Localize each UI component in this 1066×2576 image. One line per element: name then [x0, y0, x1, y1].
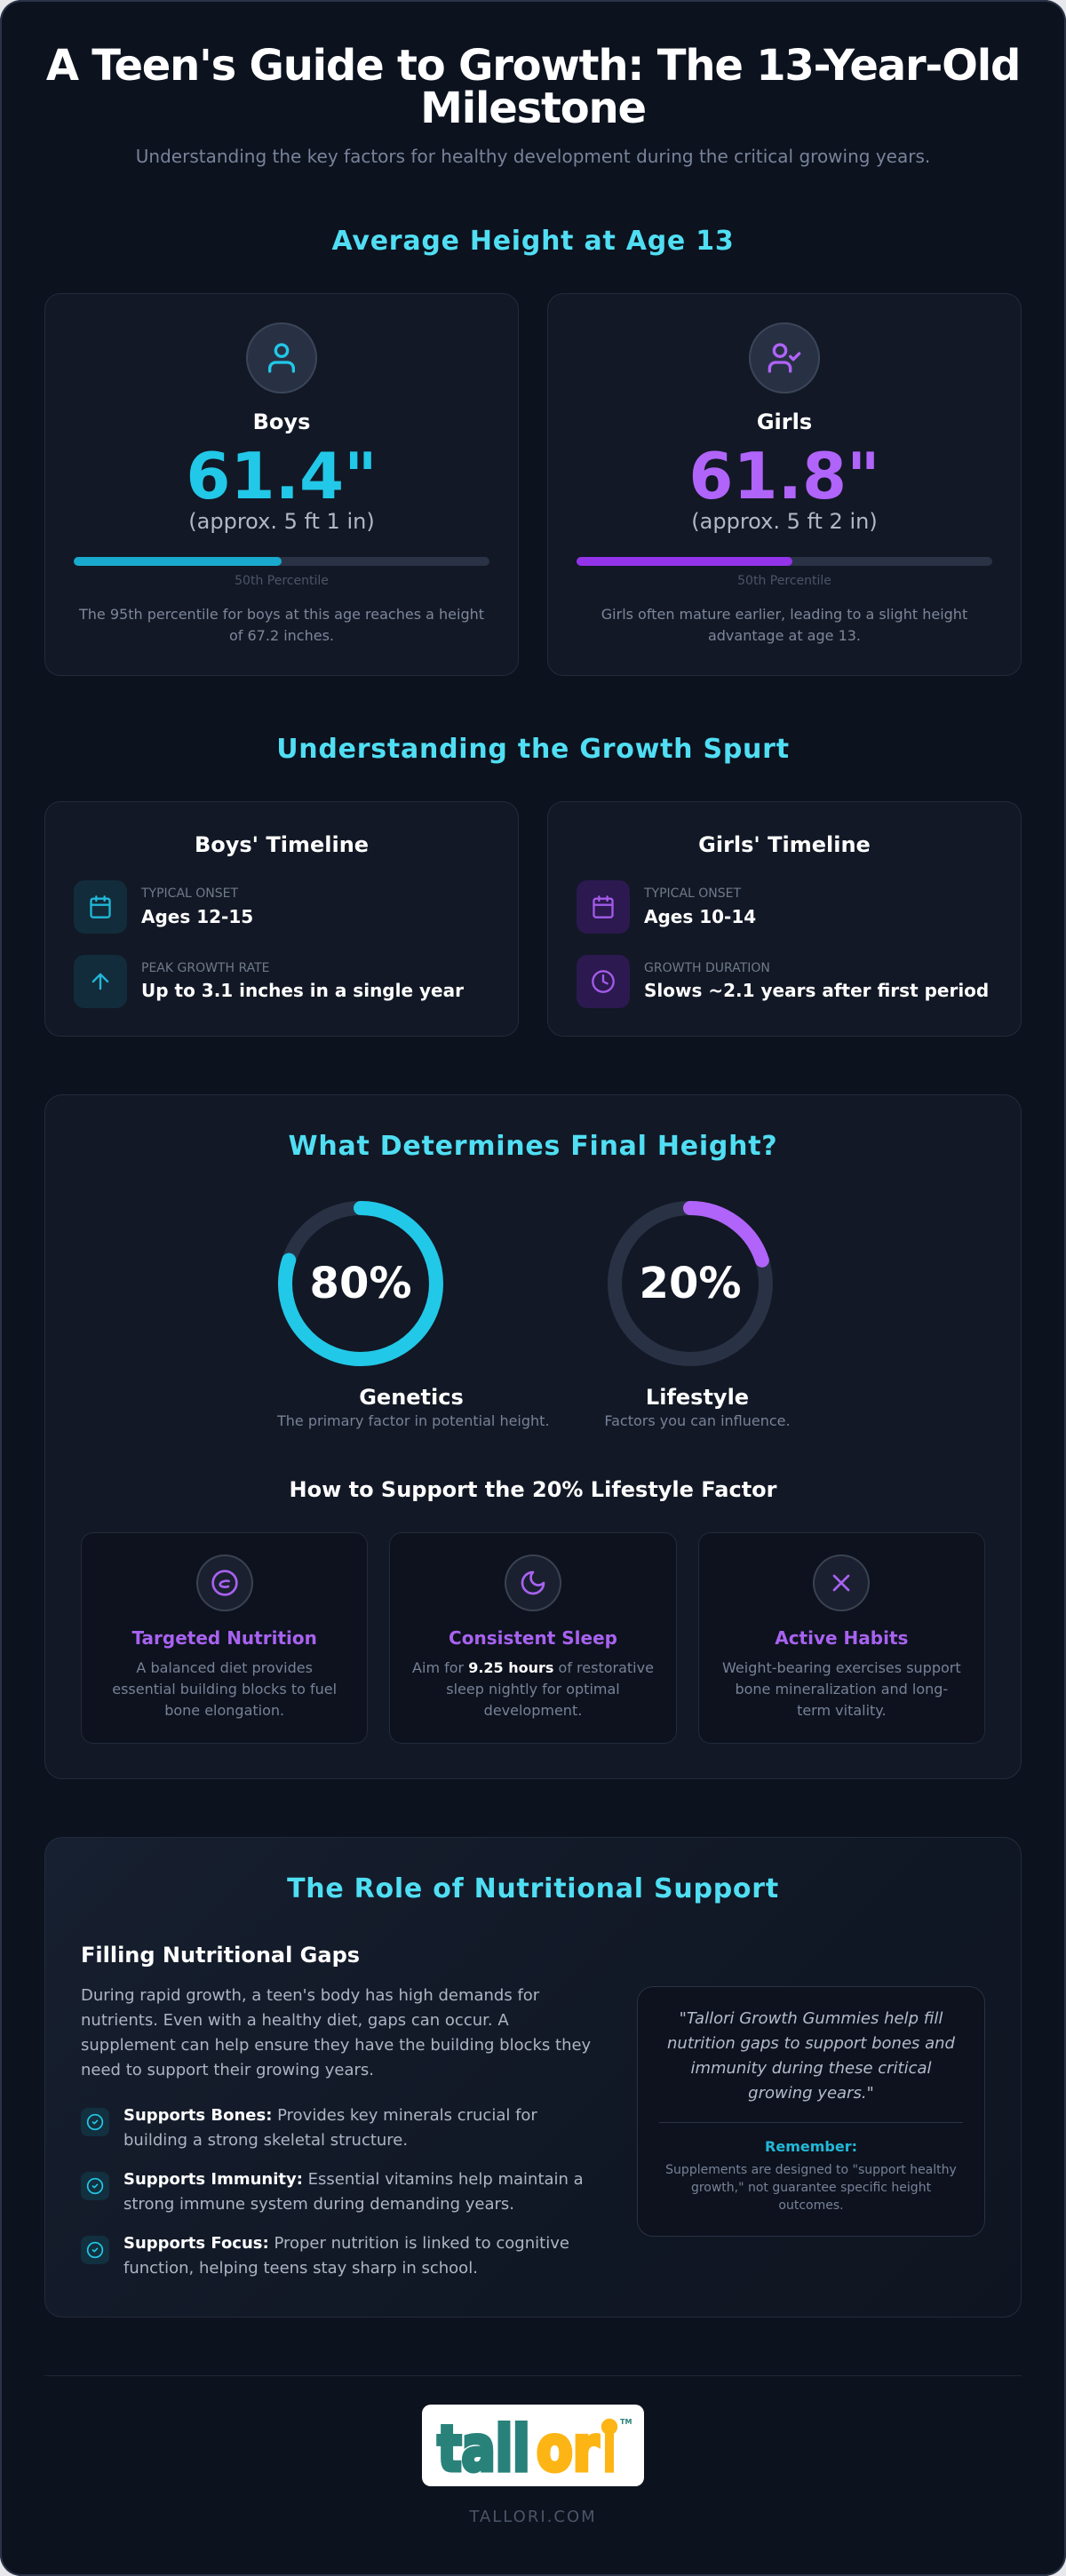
body text: nutrients. Even with a healthy diet, gaps can occur. A: [81, 2011, 509, 2030]
heading: Targeted Nutrition: [131, 1627, 317, 1649]
panel: girls height: [547, 293, 1022, 676]
benefit: focus: function, helping teens stay sharp in school.: [123, 2259, 478, 2278]
caption: genetics: The primary factor in potential height.: [277, 1412, 550, 1429]
disclaimer: growth," not guarantee specific height: [691, 2181, 931, 2195]
icon: calendar: [577, 880, 630, 934]
quote text: [667, 2009, 955, 2103]
stat: boys height: 61.4": [186, 439, 378, 513]
stat: feet and inches: (approx. 5 ft 1 in): [188, 509, 375, 534]
panel: final height determinants: [44, 1094, 1022, 1779]
icon: nutrition: [196, 1554, 253, 1611]
icon: calendar: [74, 880, 127, 934]
disclaimer: [665, 2163, 957, 2213]
panel: nutritional support: [44, 1837, 1022, 2318]
section heading: What Determines Final Height?: [289, 1131, 777, 1162]
quote text: immunity during these critical: [690, 2059, 932, 2078]
description: [412, 1659, 654, 1719]
icon: boy: [246, 322, 317, 394]
value: duration: Slows ~2.1 years after first period: [644, 980, 989, 1001]
description: bone mineralization and long-: [735, 1681, 948, 1697]
benefit: focus: Supports Focus: Proper nutrition is linked to cognitive: [123, 2234, 569, 2253]
subtitle: Understanding the key factors for healthy development during the critical growing years.: [136, 146, 930, 167]
body text: supplement can help ensure they have the building blocks they: [81, 2036, 591, 2055]
benefit: immunity: Supports Immunity: Essential vitamins help maintain a: [123, 2170, 584, 2189]
progress bar: boys percentile: [74, 557, 489, 566]
label: onset: TYPICAL ONSET: [141, 886, 238, 901]
benefit: bones: [123, 2106, 537, 2150]
label: girls: Girls: [757, 409, 812, 434]
description: [78, 606, 484, 644]
logo: tallori: [422, 2405, 644, 2486]
panel: boys timeline: [44, 801, 519, 1037]
description: Weight-bearing exercises support: [722, 1659, 961, 1676]
logo: tallori: or: [537, 2413, 599, 2485]
card: activity: [698, 1532, 985, 1744]
description: bone elongation.: [164, 1702, 284, 1719]
description: [722, 1659, 961, 1719]
description: of 67.2 inches.: [229, 627, 334, 644]
description: [601, 606, 967, 644]
logo: tallori: tall: [437, 2413, 529, 2485]
label: duration: GROWTH DURATION: [644, 961, 770, 975]
label: boys: Boys: [253, 409, 310, 434]
body text: need to support their growing years.: [81, 2061, 374, 2079]
section heading: growth spurt: Understanding the Growth Spurt: [276, 734, 790, 765]
title: [46, 41, 1020, 133]
footer divider: [44, 2375, 1022, 2376]
progress bar: girls percentile: [577, 557, 992, 566]
panel: boys height: [44, 293, 519, 676]
quote text: nutrition gaps to support bones and: [667, 2034, 955, 2053]
disclaimer: Supplements are designed to "support healthy: [665, 2163, 957, 2177]
icon: check focus: [81, 2236, 109, 2264]
donut chart: genetics 80%: 80%: [310, 1259, 411, 1308]
callout: quote: [637, 1986, 985, 2237]
subheading: lifestyle support: How to Support the 20% Lifestyle Factor: [290, 1477, 776, 1502]
description: advantage at age 13.: [708, 627, 861, 644]
donut chart: genetics 80%: [278, 1201, 443, 1366]
icon: check bones: [81, 2108, 109, 2136]
website: TALLORI.COM: [469, 2508, 597, 2526]
icon: check immunity: [81, 2172, 109, 2200]
section heading: average height: Average Height at Age 13: [332, 226, 734, 257]
icon: clock: [577, 955, 630, 1008]
heading: Consistent Sleep: [449, 1627, 617, 1649]
heading: Girls' Timeline: [698, 832, 871, 857]
disclaimer: outcomes.: [778, 2198, 844, 2213]
benefit: immunity: [123, 2170, 584, 2214]
description: term vitality.: [797, 1702, 887, 1719]
divider: [659, 2122, 963, 2123]
section heading: The Role of Nutritional Support: [287, 1873, 779, 1904]
percentile caption: 50th Percentile: [737, 574, 831, 588]
description: [112, 1659, 337, 1719]
donut chart: lifestyle 20%: 20%: [640, 1259, 741, 1308]
remember label: Remember:: [765, 2138, 857, 2155]
benefit: immunity: strong immune system during demanding years.: [123, 2195, 514, 2214]
icon: arrow up: [74, 955, 127, 1008]
description: The 95th percentile for boys at this age reaches a height: [79, 606, 484, 623]
benefit: bones: Supports Bones: Provides key minerals crucial for: [123, 2106, 537, 2125]
stat: feet and inches: (approx. 5 ft 2 in): [691, 509, 878, 534]
percentile caption: 50th Percentile: [235, 574, 329, 588]
logo: tallori: TM: [620, 2418, 632, 2426]
label: lifestyle: Lifestyle: [646, 1385, 749, 1410]
quote text: growing years.": [748, 2084, 874, 2103]
icon: moon: [505, 1554, 561, 1611]
benefit: bones: building a strong skeletal structure.: [123, 2131, 408, 2150]
quote text: "Tallori Growth Gummies help fill: [680, 2009, 943, 2028]
description: essential building blocks to fuel: [112, 1681, 337, 1697]
benefit: focus: [123, 2234, 569, 2278]
description: A balanced diet provides: [136, 1659, 313, 1676]
description: development.: [484, 1702, 582, 1719]
value: onset: Ages 10-14: [644, 906, 756, 927]
label: genetics: Genetics: [359, 1385, 464, 1410]
donut chart: lifestyle 20%: [608, 1201, 773, 1366]
card: sleep: [389, 1532, 677, 1744]
description: sleep nightly for optimal: [446, 1681, 620, 1697]
card: nutrition: [81, 1532, 368, 1744]
body text: During rapid growth, a teen's body has high demands for: [81, 1986, 539, 2005]
panel: girls timeline: [547, 801, 1022, 1037]
value: peak rate: Up to 3.1 inches in a single year: [141, 980, 464, 1001]
value: onset: Ages 12-15: [141, 906, 253, 927]
heading: Boys' Timeline: [195, 832, 369, 857]
logo: tallori: i: [603, 2413, 616, 2485]
heading: Active Habits: [775, 1627, 908, 1649]
icon: activity cross: [813, 1554, 870, 1611]
caption: lifestyle: Factors you can influence.: [604, 1412, 791, 1429]
description: Aim for 9.25 hours of restorative: [412, 1659, 654, 1676]
title: A Teen's Guide to Growth: The 13-Year-Old: [46, 41, 1020, 91]
icon: girl: [749, 322, 820, 394]
title: Milestone: [420, 83, 646, 133]
description: Girls often mature earlier, leading to a slight height: [601, 606, 967, 623]
label: onset: TYPICAL ONSET: [644, 886, 741, 901]
body text: [81, 1986, 591, 2079]
stat: girls height: 61.8": [688, 439, 880, 513]
label: peak rate: PEAK GROWTH RATE: [141, 961, 270, 975]
subheading: Filling Nutritional Gaps: [81, 1943, 360, 1968]
